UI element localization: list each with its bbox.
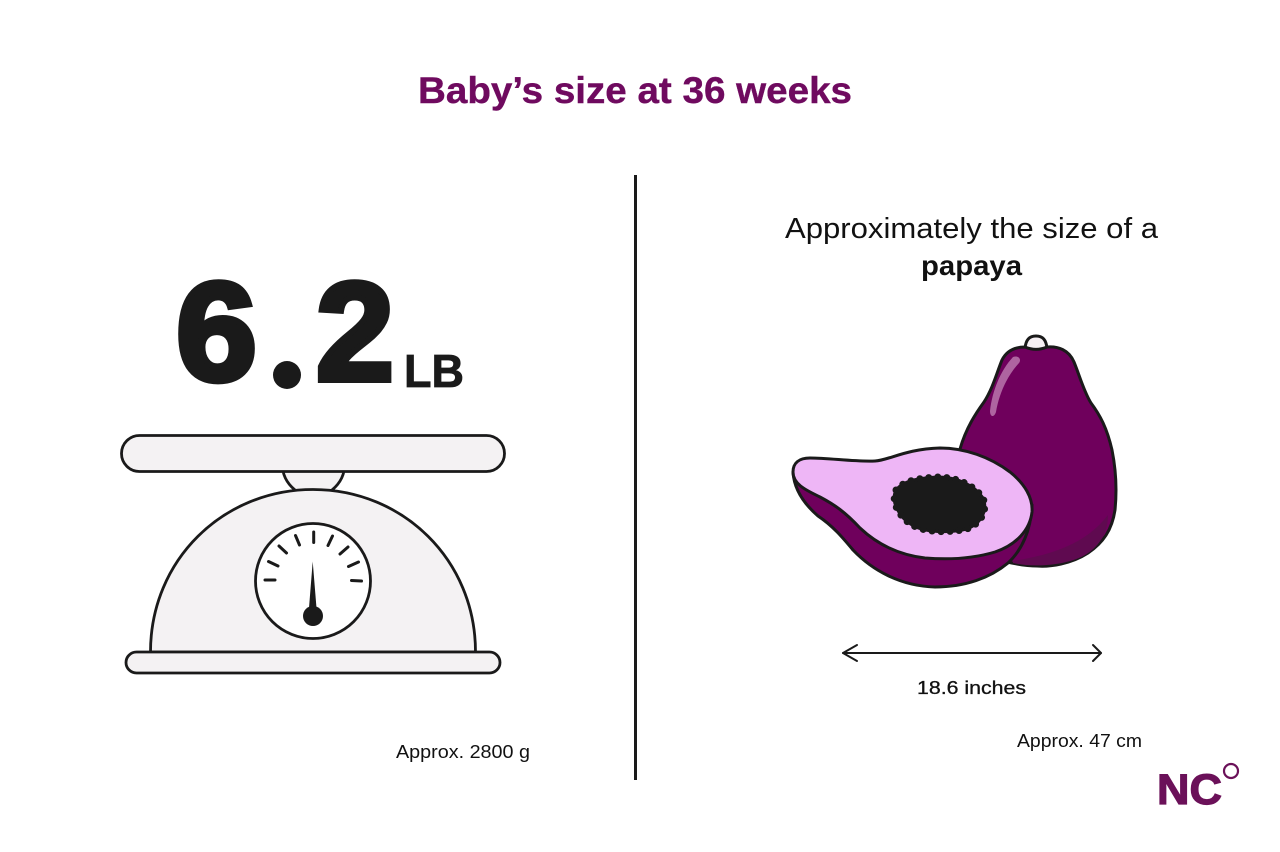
whole papaya	[960, 336, 1116, 566]
title: Baby’s size at 36 weeks	[418, 70, 852, 111]
panel: size comparison	[785, 213, 1159, 751]
weight value: 2	[316, 253, 394, 410]
weight in grams: Approx. 2800 g	[396, 742, 530, 762]
weight value: .	[280, 313, 302, 402]
weight value	[176, 253, 464, 410]
arrow: length	[843, 645, 1101, 661]
icon: papaya	[793, 336, 1116, 587]
papaya half	[793, 448, 1032, 587]
logo: NC	[1157, 766, 1222, 814]
divider	[634, 175, 637, 780]
papaya seeds	[894, 477, 985, 532]
comparison heading: papaya	[921, 250, 1022, 281]
weight value: LB	[404, 345, 464, 397]
panel: weight	[122, 253, 530, 762]
comparison heading: Approximately the size of a	[785, 213, 1159, 245]
length in inches: 18.6 inches	[917, 677, 1026, 698]
weight value: 6	[176, 253, 257, 410]
icon: kitchen scale	[122, 436, 504, 673]
comparison heading	[785, 213, 1159, 281]
length in centimetres: Approx. 47 cm	[1017, 731, 1142, 751]
icon: scale dial	[256, 524, 370, 638]
